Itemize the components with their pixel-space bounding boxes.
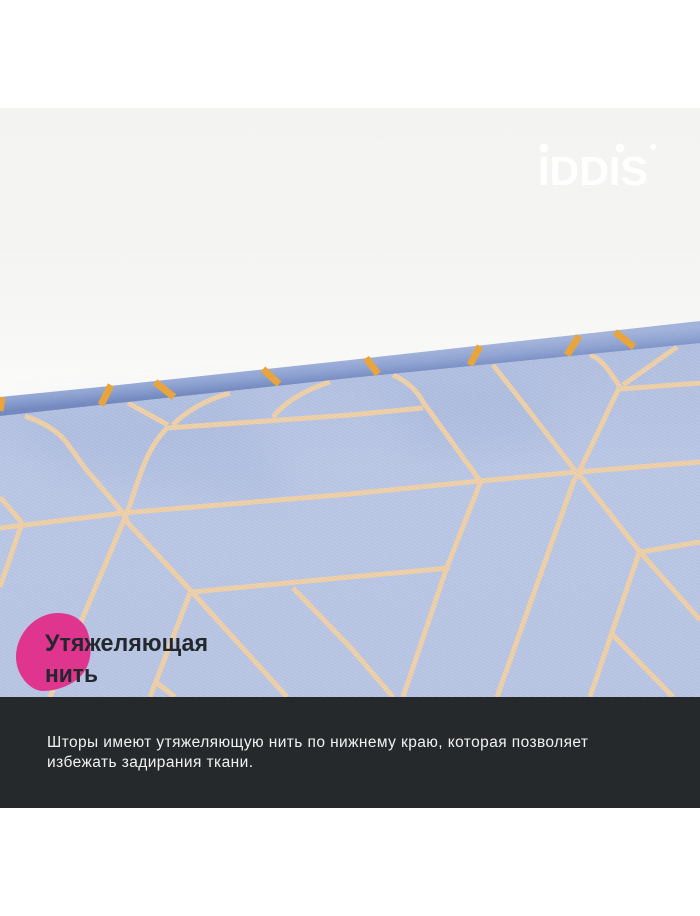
photo: wall background bbox=[0, 108, 700, 408]
heading: Утяжеляющая нить: нить bbox=[45, 661, 98, 688]
photo: curtain fabric bbox=[0, 341, 700, 697]
caption text: Шторы имеют утяжеляющую нить по нижнему краю, которая позволяет bbox=[47, 734, 588, 751]
caption text bbox=[47, 734, 588, 771]
fabric gold geometric pattern bbox=[0, 347, 700, 697]
logo: iDDiS: IDDIS bbox=[538, 148, 648, 194]
caption text: избежать задирания ткани. bbox=[47, 754, 253, 771]
heading: Утяжеляющая нить: Утяжеляющая bbox=[45, 630, 208, 657]
heading: Утяжеляющая нить bbox=[45, 630, 208, 688]
dark caption band bbox=[0, 697, 700, 808]
accent: pink blob bbox=[16, 613, 91, 691]
hem orange stripes bbox=[0, 332, 634, 411]
photo: curtain hem with weighted thread bbox=[0, 321, 700, 416]
